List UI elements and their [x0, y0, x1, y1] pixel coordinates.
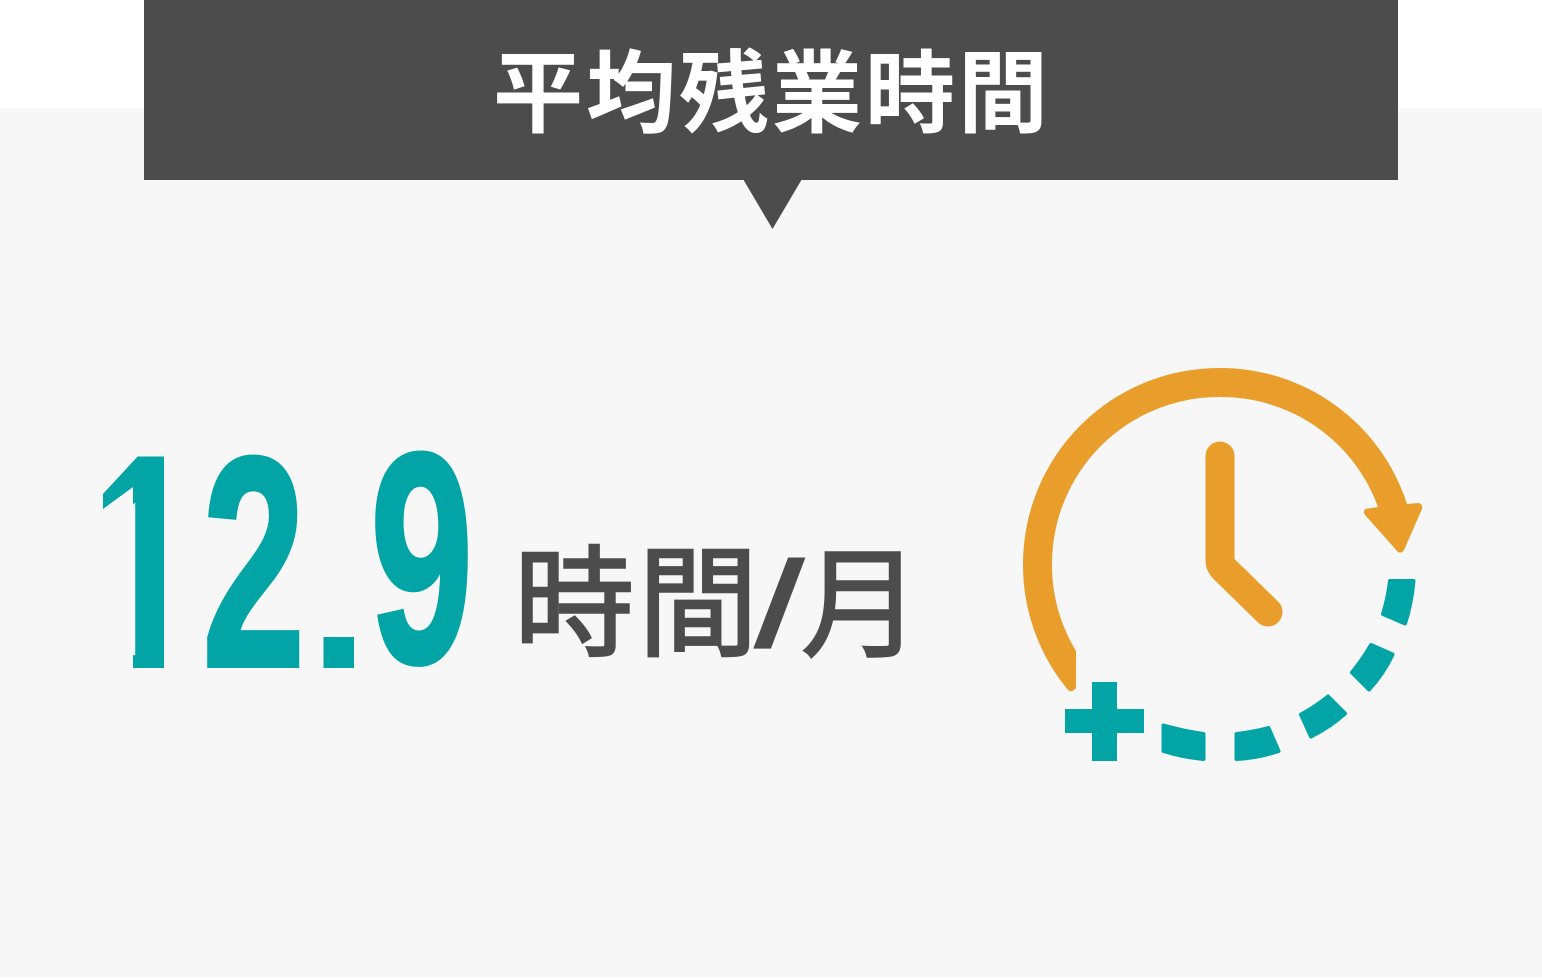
- icon: clock with overtime: [1023, 368, 1422, 761]
- clock hands: [1220, 456, 1268, 612]
- value: 12.9: .: [311, 396, 368, 730]
- unit: hours per month: 月: [801, 539, 921, 673]
- unit: hours per month: [514, 537, 921, 673]
- value: 12.9: 9: [370, 390, 473, 726]
- dashed arc: [1164, 581, 1414, 759]
- heading banner: [144, 0, 1398, 229]
- unit: hours per month: /: [756, 537, 803, 671]
- value: 12.9: 1: [89, 387, 202, 765]
- unit: hours per month: 時: [514, 538, 634, 672]
- value: 12.9: [103, 450, 468, 668]
- title: 平均残業時間: [493, 45, 1051, 145]
- unit: hours per month: 間: [638, 538, 758, 672]
- value: 12.9: 2: [202, 394, 305, 730]
- plus sign: [1065, 682, 1144, 761]
- circular arrow: [1023, 368, 1422, 691]
